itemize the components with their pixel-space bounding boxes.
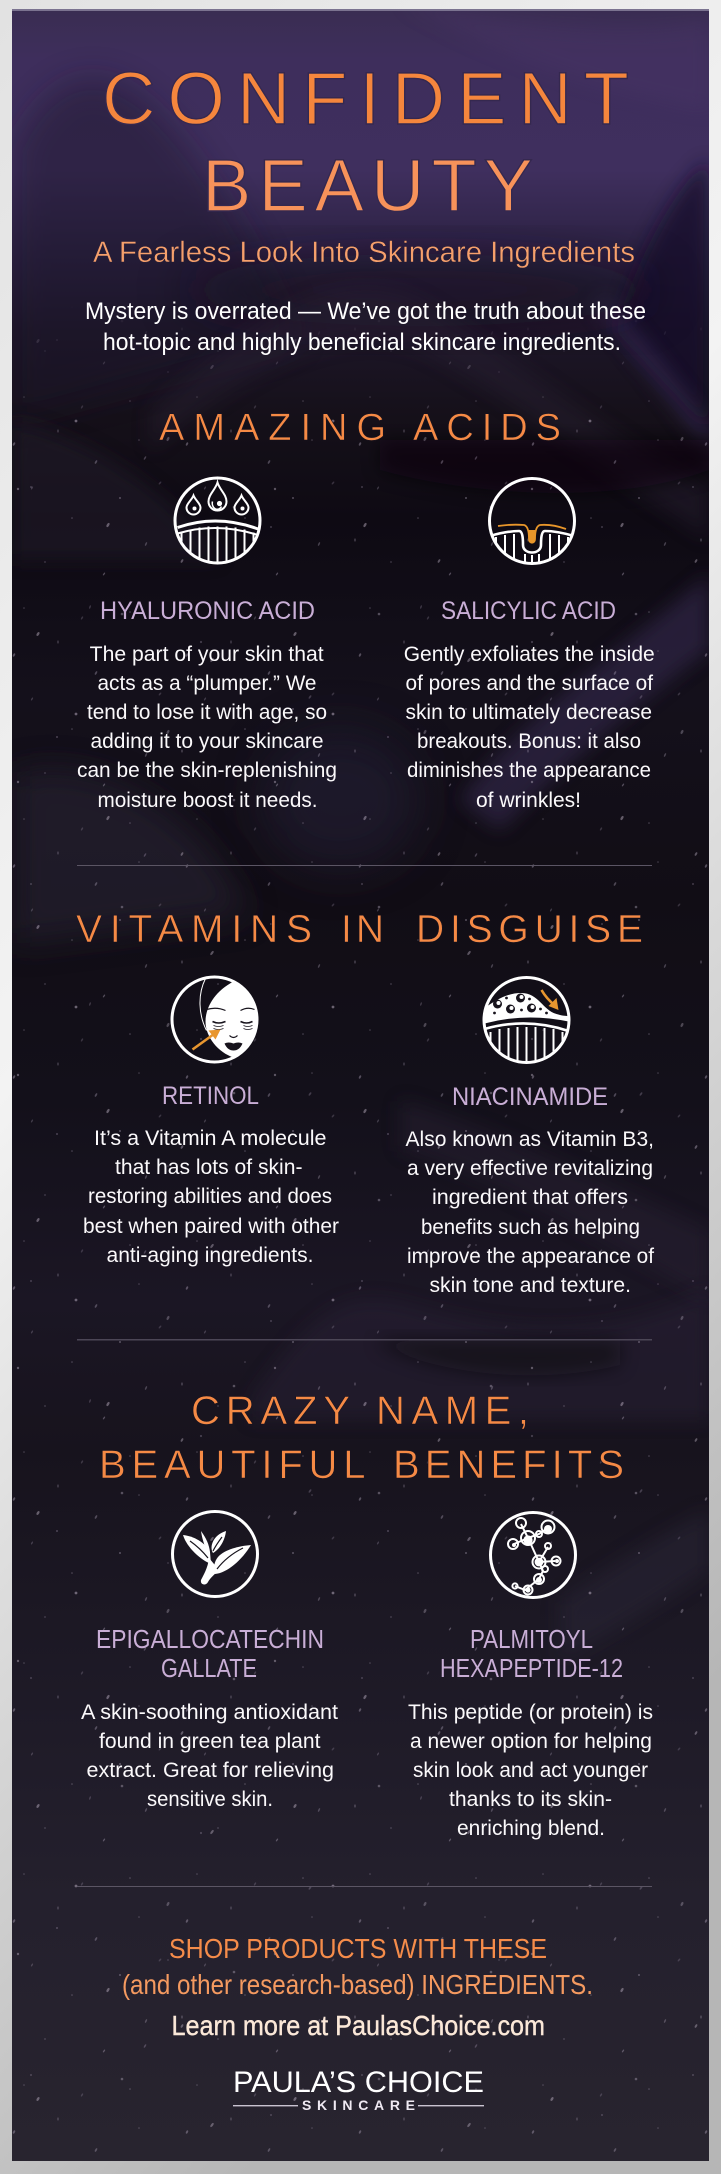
- title: [102, 57, 629, 227]
- text: hyaluronic acid: adding it to your skincare: [90, 730, 324, 753]
- text: retinol: best when paired with other: [83, 1215, 339, 1238]
- text: retinol: It’s a Vitamin A molecule: [94, 1127, 326, 1150]
- logo: paula's choice skincare: SKINCARE: [302, 2097, 415, 2113]
- title: CONFIDENT: [102, 57, 629, 140]
- logo: paula's choice skincare: PAULA’S CHOICE: [233, 2066, 484, 2099]
- text: salicylic acid: SALICYLIC ACID: [441, 597, 616, 625]
- text: hyaluronic acid: HYALURONIC ACID: [100, 597, 315, 625]
- text: hyaluronic acid: [77, 597, 337, 812]
- text: epigallocatechin gallate: [81, 1624, 338, 1811]
- text: retinol: RETINOL: [162, 1082, 259, 1110]
- heading: vitamins in disguise: DISGUISE: [416, 908, 643, 951]
- intro text: [85, 298, 646, 356]
- text: hyaluronic acid: acts as a “plumper.” We: [98, 672, 316, 695]
- heading: crazy name, beautiful benefits: BEAUTIFUL: [99, 1443, 366, 1487]
- icon: peptide molecule: [490, 1512, 576, 1598]
- text: hyaluronic acid: can be the skin-replenishing: [77, 759, 337, 782]
- text: epigallocatechin gallate: sensitive skin.: [147, 1788, 273, 1811]
- subtitle: A Fearless Look Into Skincare Ingredients: [93, 236, 635, 269]
- title: BEAUTY: [202, 144, 533, 227]
- text: epigallocatechin gallate: A skin-soothing antioxidant: [81, 1701, 338, 1724]
- text: palmitoyl hexapeptide-12: enriching blend.: [457, 1817, 605, 1840]
- text: hyaluronic acid: The part of your skin that: [90, 643, 324, 666]
- text: niacinamide: improve the appearance of: [407, 1245, 654, 1268]
- intro text: Mystery is overrated — We’ve got the truth about these: [85, 298, 646, 325]
- heading: crazy name, beautiful benefits: CRAZY: [191, 1389, 350, 1433]
- logo: paula's choice skincare: [233, 2066, 484, 2113]
- text: niacinamide: skin tone and texture.: [430, 1274, 631, 1297]
- icon: green tea leaf: [172, 1512, 258, 1596]
- text: palmitoyl hexapeptide-12: skin look and act younger: [413, 1759, 648, 1782]
- text: palmitoyl hexapeptide-12: thanks to its skin-: [449, 1788, 612, 1811]
- text: retinol: [83, 1082, 339, 1267]
- heading: vitamins in disguise: IN: [341, 908, 384, 951]
- heading: crazy name, beautiful benefits: BENEFITS: [393, 1443, 624, 1487]
- text: hyaluronic acid: moisture boost it needs.: [98, 789, 318, 812]
- text: salicylic acid: Gently exfoliates the inside: [404, 643, 655, 666]
- text: retinol: that has lots of skin-: [115, 1156, 302, 1179]
- call to action: (and other research-based) INGREDIENTS.: [122, 1969, 593, 2000]
- text: retinol: anti-aging ingredients.: [106, 1244, 314, 1267]
- heading: amazing acids: [159, 407, 561, 449]
- icon: hyaluronic acid drops: [175, 478, 260, 564]
- text: salicylic acid: of wrinkles!: [476, 789, 581, 812]
- icon: salicylic acid pore: [490, 478, 574, 565]
- text: salicylic acid: of pores and the surface of: [406, 672, 653, 695]
- text: epigallocatechin gallate: GALLATE: [161, 1653, 257, 1683]
- intro text: hot-topic and highly beneficial skincare ingredients.: [103, 329, 621, 356]
- text: salicylic acid: [404, 597, 655, 812]
- call to action: [122, 1933, 593, 2041]
- heading: vitamins in disguise: VITAMINS: [76, 908, 312, 951]
- text: hyaluronic acid: tend to lose it with age, so: [87, 701, 327, 724]
- icon: niacinamide skin: [482, 978, 570, 1064]
- heading: vitamins in disguise: [76, 908, 643, 951]
- text: palmitoyl hexapeptide-12: PALMITOYL: [470, 1624, 593, 1654]
- text: palmitoyl hexapeptide-12: HEXAPEPTIDE-12: [440, 1653, 623, 1683]
- text: niacinamide: Also known as Vitamin B3,: [406, 1128, 654, 1151]
- heading: amazing acids: AMAZING: [159, 407, 386, 449]
- text: palmitoyl hexapeptide-12: a newer option for helping: [410, 1730, 652, 1753]
- icon: retinol face: [172, 977, 257, 1062]
- heading: amazing acids: ACIDS: [413, 407, 561, 449]
- text: niacinamide: NIACINAMIDE: [452, 1083, 608, 1111]
- text: salicylic acid: breakouts. Bonus: it also: [417, 730, 641, 753]
- text: niacinamide: benefits such as helping: [421, 1216, 640, 1239]
- text: epigallocatechin gallate: extract. Great for relieving: [86, 1759, 334, 1782]
- text: palmitoyl hexapeptide-12: This peptide (or protein) is: [408, 1701, 653, 1724]
- text: niacinamide: [406, 1083, 654, 1297]
- text: palmitoyl hexapeptide-12: [408, 1624, 653, 1840]
- text: salicylic acid: diminishes the appearance: [407, 759, 651, 782]
- call to action: Learn more at PaulasChoice.com: [172, 2010, 545, 2041]
- text: epigallocatechin gallate: EPIGALLOCATECHIN: [96, 1624, 324, 1654]
- heading: crazy name, beautiful benefits: [99, 1389, 624, 1487]
- text: niacinamide: a very effective revitalizing: [407, 1157, 653, 1180]
- text: epigallocatechin gallate: found in green tea plant: [99, 1730, 321, 1753]
- text: niacinamide: ingredient that offers: [432, 1186, 628, 1209]
- text: salicylic acid: skin to ultimately decrease: [406, 701, 652, 724]
- heading: crazy name, beautiful benefits: NAME,: [376, 1389, 529, 1433]
- text: retinol: restoring abilities and does: [88, 1185, 332, 1208]
- call to action: SHOP PRODUCTS WITH THESE: [169, 1933, 547, 1964]
